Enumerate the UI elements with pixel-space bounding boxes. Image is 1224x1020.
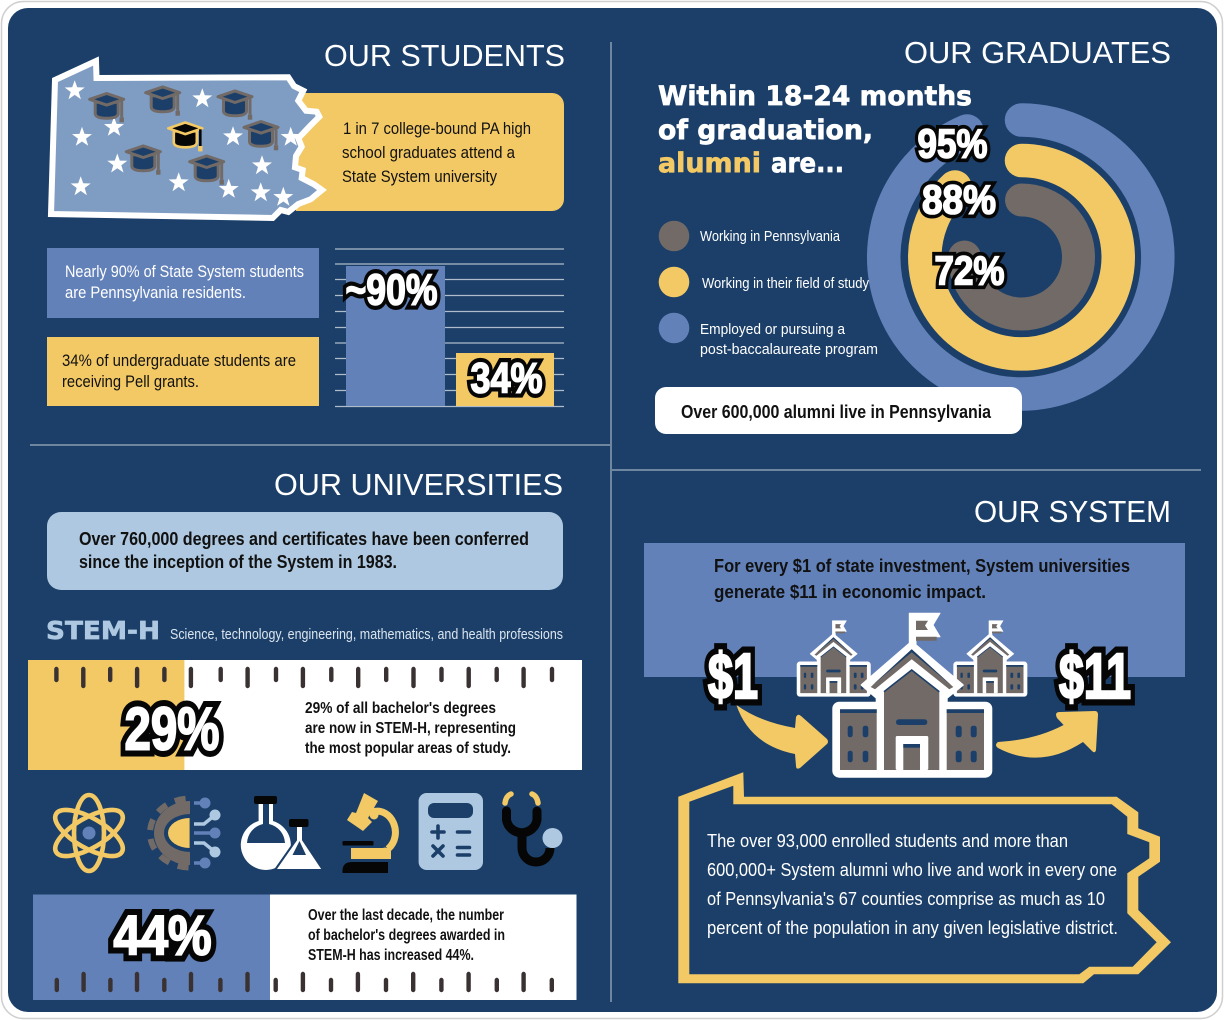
callout: 600,000 alumni: Over 600,000 alumni live in Pennsylvania (681, 402, 992, 422)
STEM-H definition: STEM-H (46, 616, 160, 645)
panel: our system (644, 494, 1185, 983)
stat box: 90 percent residents (47, 248, 319, 318)
stat box: 90 percent residents: Nearly 90% of State System students (65, 262, 304, 281)
icon: microscope (342, 793, 395, 873)
ruler: 29 percent (28, 660, 582, 770)
callout: PA outline with population text (678, 772, 1171, 983)
label: eleven dollars: $11 (1059, 640, 1131, 712)
legend: Working in their field of study (702, 275, 869, 292)
ruler: 29 percent: 29% of all bachelor's degrees (305, 700, 496, 717)
panel: our students (47, 38, 565, 406)
icon: atom (49, 795, 129, 871)
ruler: 44 percent (33, 894, 576, 1000)
icon: main school (832, 613, 992, 778)
ruler: 44 percent: STEM-H has increased 44%. (308, 947, 474, 964)
legend: Employed or pursuing a (700, 321, 846, 338)
callout: 760,000 degrees: Over 760,000 degrees and certificates have been conferred (79, 529, 529, 549)
callout: PA outline with population text: 600,000+ System alumni who live and work in every one (707, 859, 1117, 880)
heading: our graduates: OUR GRADUATES (904, 35, 1171, 70)
stat box: 34 percent Pell: receiving Pell grants. (62, 372, 199, 391)
callout: 1 in 7: State System university (342, 167, 497, 186)
legend: post-baccalaureate program (700, 341, 878, 358)
ruler: 29 percent: 29% (124, 696, 220, 762)
heading: our system: OUR SYSTEM (974, 494, 1171, 529)
callout: economic impact (644, 543, 1185, 677)
stat box: 90 percent residents: are Pennsylvania residents. (65, 283, 246, 302)
legend: Working in Pennsylvania (700, 228, 841, 245)
ruler: 44 percent: 44% (114, 904, 212, 966)
callout: 1 in 7: 1 in 7 college-bound PA high (343, 119, 531, 138)
heading: our students: OUR STUDENTS (324, 38, 565, 73)
heading: our universities: OUR UNIVERSITIES (274, 467, 563, 502)
STEM-H definition: Science, technology, engineering, mathematics, and health professions (170, 626, 563, 643)
panel: our graduates (655, 35, 1171, 434)
subheading: within 18-24 months: alumni (658, 148, 761, 179)
bar chart: ~90% (346, 266, 438, 314)
stat box: 34 percent Pell (47, 337, 319, 406)
arrow: school to eleven dollars (996, 711, 1098, 758)
panel: our universities (28, 467, 582, 1000)
subheading: within 18-24 months: are... (771, 148, 844, 179)
icon: small school right (953, 621, 1027, 697)
radial chart: 88% (922, 176, 996, 222)
callout: PA outline with population text: The over 93,000 enrolled students and more than (707, 830, 1068, 851)
callout: 1 in 7: school graduates attend a (342, 143, 515, 162)
subheading: within 18-24 months: of graduation, (658, 115, 873, 146)
callout: 760,000 degrees (47, 512, 563, 590)
legend (659, 221, 878, 358)
stat box: 34 percent Pell: 34% of undergraduate students are (62, 351, 296, 370)
ruler: 44 percent: of bachelor's degrees awarded in (308, 927, 505, 944)
icon: gear circuit (150, 798, 230, 868)
label: one dollar: $1 (708, 640, 758, 712)
label: eleven dollars (1059, 640, 1131, 712)
callout: economic impact: For every $1 of state investment, System universities (714, 556, 1130, 576)
callout: PA outline with population text: of Pennsylvania's 67 counties comprise as much as 10 (707, 888, 1105, 909)
ruler: 29 percent: are now in STEM-H, representing (305, 720, 516, 737)
callout: 760,000 degrees: since the inception of the System in 1983. (79, 552, 397, 572)
arrow: dollar to school (736, 705, 828, 769)
ruler: 44 percent: Over the last decade, the number (308, 907, 504, 924)
icon: flasks (241, 796, 323, 870)
icon: small school left (797, 621, 871, 697)
STEM-H definition (46, 616, 563, 645)
callout: economic impact: generate $11 in economic impact. (714, 582, 986, 602)
subheading: within 18-24 months (658, 81, 972, 179)
callout: 600,000 alumni (655, 387, 1022, 434)
radial chart (884, 120, 1158, 394)
subheading: within 18-24 months: Within 18-24 months (658, 81, 972, 112)
bar chart: 34% (470, 354, 542, 402)
callout: PA outline with population text: percent of the population in any given legislative district. (707, 917, 1118, 938)
radial chart: 95% (918, 120, 988, 166)
bar chart (335, 249, 564, 406)
map: Pennsylvania with stars and caps (51, 61, 322, 218)
icon: stethoscope (505, 794, 562, 862)
icon: calculator (419, 793, 483, 870)
radial chart: 72% (934, 248, 1004, 294)
callout: 1 in 7 (296, 93, 564, 211)
ruler: 29 percent: the most popular areas of study. (305, 740, 511, 757)
